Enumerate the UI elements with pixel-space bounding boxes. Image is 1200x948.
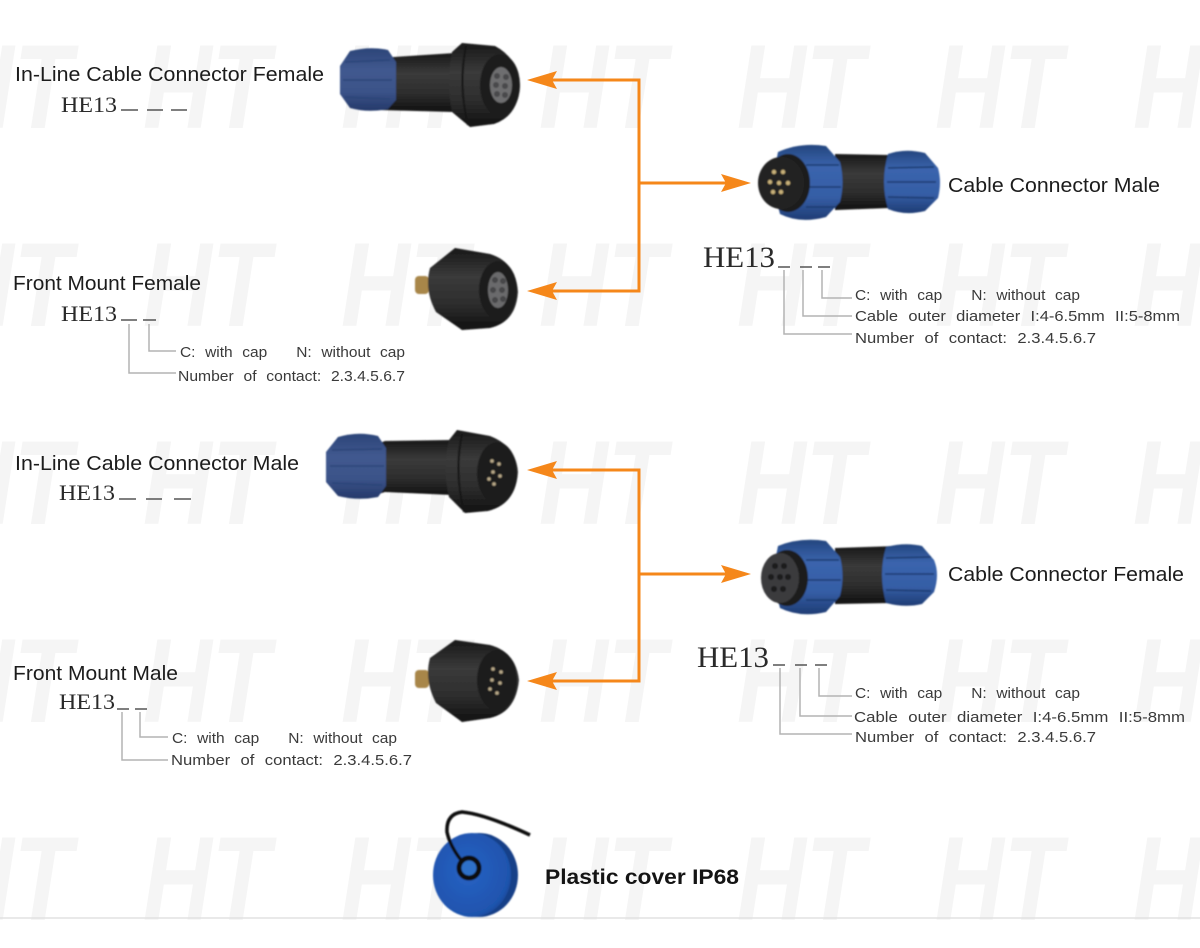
label: cable connector male: Cable Connector Male [948,174,1160,197]
label: cable connector female: Cable Connector Female [948,563,1184,586]
label: front mount female [13,272,405,385]
icon: in-line cable connector female [340,43,520,127]
label: front mount male: Number of contact: 2.3.4.5.6.7 [171,753,412,769]
label: front mount female: Number of contact: 2.3.4.5.6.7 [178,369,405,385]
icon: in-line cable connector male [326,430,518,513]
label: in-line cable connector female: HE13 [61,92,117,117]
label: in-line cable connector male: HE13 [59,480,115,505]
label: cable connector female: HE13 [697,641,769,674]
watermark pattern: HT [341,614,475,748]
label: front mount female: Front Mount Female [13,272,201,295]
watermark pattern: HT [539,20,673,154]
label: in-line cable connector female [15,63,324,117]
watermark pattern: HT [341,416,475,550]
watermark pattern: HT [341,20,475,154]
label: cable connector female: C: with cap N: without cap [855,686,1080,702]
panel: top connector group [340,43,940,330]
watermark pattern: HT [737,20,871,154]
label: cable connector male: Number of contact: 2.3.4.5.6.7 [855,331,1096,347]
label: front mount male: Front Mount Male [13,662,178,685]
watermark pattern: HT [737,416,871,550]
watermark pattern: HT [539,812,673,946]
label: front mount female: C: with cap N: without cap [180,345,405,361]
watermark pattern: HT [539,416,673,550]
watermark pattern: HT [143,20,277,154]
arrows: bottom group [527,461,751,690]
watermark pattern: HT [935,20,1069,154]
watermark pattern: HT [737,812,871,946]
label: in-line cable connector male: In-Line Cable Connector Male [15,452,299,475]
label: cable connector male: Cable outer diameter I:4-6.5mm II:5-8mm [855,309,1180,325]
label: cable connector female: Number of contact: 2.3.4.5.6.7 [855,730,1096,746]
watermark pattern: HT [935,812,1069,946]
watermark pattern: HT [539,614,673,748]
arrows: top group [527,71,751,300]
label: front mount male: C: with cap N: without cap [172,731,397,747]
label: front mount male: HE13 [59,689,115,714]
watermark pattern: HT [143,614,277,748]
label: cable connector male: C: with cap N: without cap [855,288,1080,304]
panel: bottom connector group [326,430,937,722]
label: front mount male [13,662,412,769]
watermark pattern: HT [539,218,673,352]
watermark pattern: HT [143,218,277,352]
label: cable connector male [703,174,1180,347]
watermark pattern: HT [341,812,475,946]
icon: front mount male [415,640,519,722]
label: in-line cable connector female: In-Line Cable Connector Female [15,63,324,86]
watermark pattern: HT [935,614,1069,748]
label: in-line cable connector male [15,452,299,505]
label: cable connector female [697,563,1185,746]
label: cable connector female: Cable outer diameter I:4-6.5mm II:5-8mm [854,710,1185,726]
watermark pattern: HT [143,416,277,550]
label: cable connector male: HE13 [703,241,775,274]
watermark pattern: HT [935,416,1069,550]
watermark pattern: HT [143,812,277,946]
watermark pattern: HT [935,218,1069,352]
watermark pattern: HT [737,614,871,748]
icon: cable connector male [758,145,940,220]
icon: cable connector female [761,540,937,614]
label: plastic cover: Plastic cover IP68 [545,866,739,889]
icon: front mount female [415,248,518,330]
label: front mount female: HE13 [61,301,117,326]
watermark pattern: HT [341,218,475,352]
watermark pattern: HT [737,218,871,352]
icon: plastic cover with strap [433,812,530,917]
